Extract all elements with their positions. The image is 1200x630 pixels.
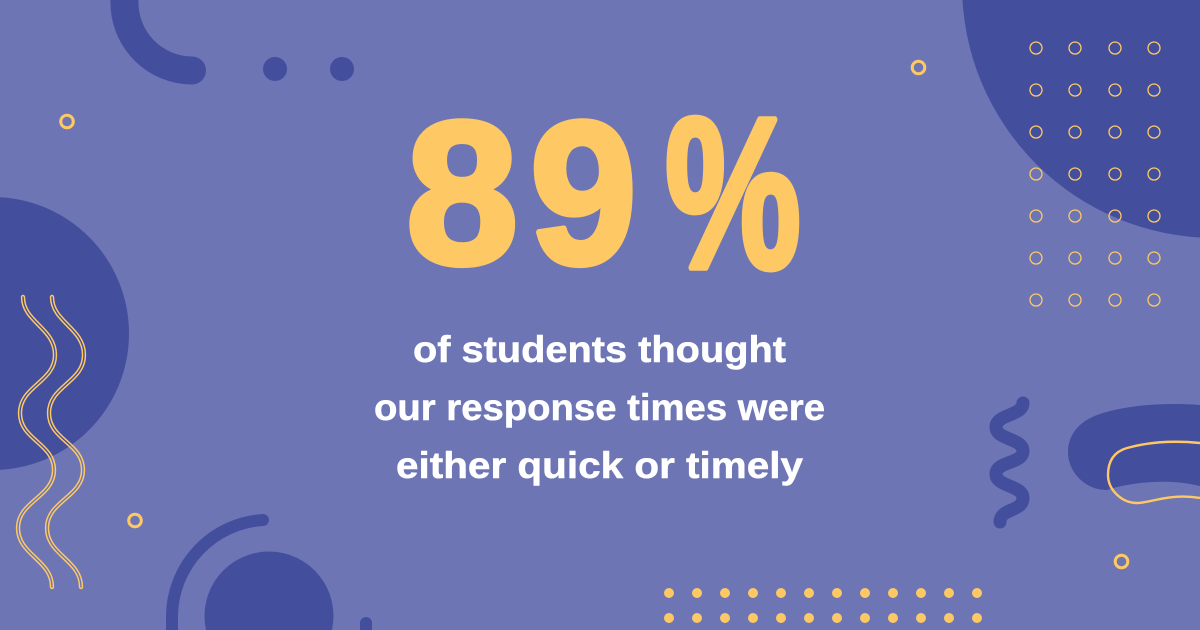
big statistic: 8 (406, 80, 518, 306)
bottom dot grid (664, 588, 982, 623)
bottom circle with arc (172, 520, 366, 630)
big statistic (406, 73, 801, 314)
small yellow rings (61, 61, 1128, 568)
wavy double lines (16, 294, 86, 590)
top dots (263, 57, 354, 81)
blob with outline (1068, 404, 1200, 503)
squiggle (996, 403, 1023, 522)
top-left arc (124, 0, 192, 70)
dotted ring grid (1030, 42, 1160, 306)
left large circle (0, 197, 129, 470)
big statistic: 9 (530, 79, 637, 306)
description text: of students thought (413, 329, 786, 370)
big statistic: % (665, 73, 801, 314)
description text: either quick or timely (396, 445, 803, 486)
top-right large circle (962, 0, 1200, 238)
description text (374, 329, 825, 486)
description text: our response times were (374, 387, 825, 428)
